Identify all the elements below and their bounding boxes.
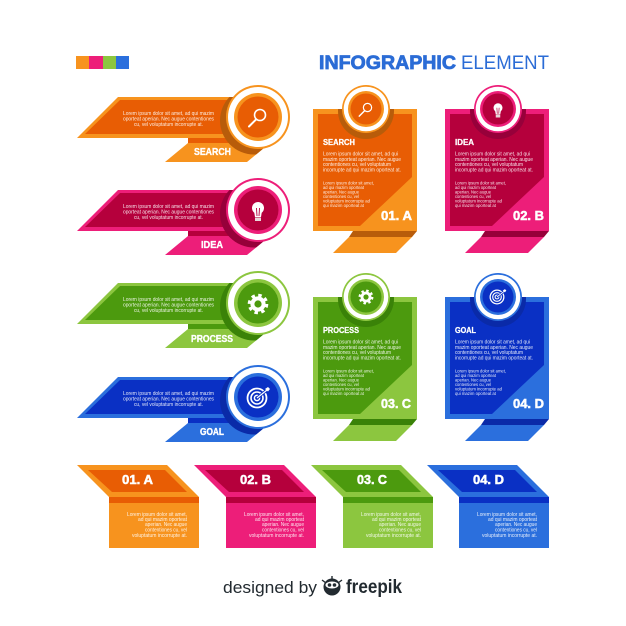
banner: idea: Lorem ipsum dolor sit amet, ad qui mazim: [123, 204, 214, 210]
bottom panel: 01. A: [77, 465, 199, 548]
card: goal 04. D: contentiones cu, vel: [455, 382, 491, 387]
card: process 03. C: 03. C: [381, 397, 411, 411]
card: goal 04. D: ad qui mazim oporteat: [455, 373, 497, 378]
card: process 03. C: Lorem ipsum dolor sit amet,: [323, 368, 374, 374]
card: idea 02. B: voluptatum incorrupte ad: [455, 198, 502, 204]
icon: freepik bee: [322, 576, 342, 596]
card: search 01. A: SEARCH: [323, 138, 355, 147]
card: idea 02. B: mazim oporteat aperian. Nec augue: [455, 157, 533, 163]
card: process 03. C: voluptatum incorrupte ad: [323, 386, 370, 392]
card: idea 02. B: contentiones cu, vel voluptatum: [455, 162, 523, 168]
banner: idea: cu, vel voluptatum incorrupte at.: [134, 215, 203, 221]
card: idea 02. B: Lorem ipsum dolor sit amet,: [455, 180, 506, 186]
footer credit: designed by: [223, 578, 318, 597]
card: idea 02. B: IDEA: [455, 138, 474, 147]
bottom panel: 03. C: 03. C: [357, 473, 387, 487]
card: search 01. A: incorrupte ad qui mazim oporteat at.: [323, 168, 401, 174]
card: goal 04. D: qui mazim oporteat at: [455, 391, 497, 396]
card: idea 02. B: qui mazim oporteat at: [455, 203, 497, 208]
colour swatches: [76, 56, 129, 69]
banner: idea: [77, 178, 290, 255]
bottom panel: 04. D: Lorem ipsum dolor sit amet,: [477, 512, 537, 518]
card: search 01. A: contentiones cu, vel: [323, 194, 359, 199]
bottom panel: 01. A: voluptatum incorrupte at.: [132, 533, 187, 539]
bottom panel: 02. B: ad qui mazim oporteat: [255, 517, 305, 523]
bottom panel: 04. D: 04. D: [473, 473, 504, 487]
title: ELEMENT: [461, 53, 549, 74]
card: search 01. A: mazim oporteat aperian. Nec augue: [323, 157, 401, 163]
card: search 01. A: [313, 83, 417, 253]
card: goal 04. D: Lorem ipsum dolor sit amet, ad qui: [455, 340, 530, 346]
card: goal 04. D: incorrupte ad qui mazim oporteat at.: [455, 356, 533, 362]
card: process 03. C: contentiones cu, vel: [323, 382, 359, 387]
bottom panel: 01. A: 01. A: [122, 473, 153, 487]
card: goal 04. D: contentiones cu, vel voluptatum: [455, 350, 523, 356]
card: search 01. A: ad qui mazim oporteat: [323, 185, 365, 190]
card: search 01. A: voluptatum incorrupte ad: [323, 198, 370, 204]
bottom panel: 03. C: voluptatum incorrupte at.: [366, 533, 421, 539]
bottom panel: 01. A: contentiones cu, vel: [145, 528, 187, 534]
card: process 03. C: aperian. Nec augue: [323, 378, 359, 382]
card: process 03. C: Lorem ipsum dolor sit amet, ad qui: [323, 340, 398, 346]
card: process 03. C: contentiones cu, vel voluptatum: [323, 350, 391, 356]
card: process 03. C: incorrupte ad qui mazim oporteat at.: [323, 356, 401, 362]
banner: search: Lorem ipsum dolor sit amet, ad qui mazim: [123, 111, 214, 117]
banner: search: SEARCH: [194, 147, 231, 158]
card: search 01. A: Lorem ipsum dolor sit amet, ad qui: [323, 152, 398, 158]
card: search 01. A: aperian. Nec augue: [323, 190, 359, 194]
banner: goal: cu, vel voluptatum incorrupte at.: [134, 402, 203, 408]
banner: process: Lorem ipsum dolor sit amet, ad qui mazim: [123, 297, 214, 303]
card: goal 04. D: voluptatum incorrupte ad: [455, 386, 502, 392]
title: INFOGRAPHIC: [319, 53, 456, 74]
bottom panel: 02. B: contentiones cu, vel: [262, 528, 304, 534]
banner: goal: oporteat aperian. Nec augue contentiones: [123, 396, 214, 402]
card: process 03. C: mazim oporteat aperian. Nec augue: [323, 345, 401, 351]
title: [319, 53, 549, 74]
bottom panel: 02. B: 02. B: [240, 473, 271, 487]
banner: search: oporteat aperian. Nec augue contentiones: [123, 116, 214, 122]
card: search 01. A: 01. A: [381, 209, 412, 223]
card: idea 02. B: [445, 83, 549, 253]
banner: process: PROCESS: [191, 334, 233, 345]
card: goal 04. D: Lorem ipsum dolor sit amet,: [455, 368, 506, 374]
bottom panel: 02. B: voluptatum incorrupte at.: [249, 533, 304, 539]
card: goal 04. D: aperian. Nec augue: [455, 378, 491, 382]
bottom panel: 01. A: ad qui mazim oporteat: [138, 517, 188, 523]
card: search 01. A: Lorem ipsum dolor sit amet,: [323, 180, 374, 186]
card: idea 02. B: contentiones cu, vel: [455, 194, 491, 199]
bottom panel: 03. C: [311, 465, 433, 548]
card: idea 02. B: 02. B: [513, 209, 544, 223]
banner: goal: GOAL: [200, 427, 224, 438]
bottom panel: 03. C: ad qui mazim oporteat: [372, 517, 422, 523]
bottom panel: 04. D: aperian. Nec augue: [495, 522, 537, 528]
banner: search: cu, vel voluptatum incorrupte at.: [134, 122, 203, 128]
banner: process: [77, 271, 290, 348]
card: idea 02. B: aperian. Nec augue: [455, 190, 491, 194]
bottom panel: 01. A: Lorem ipsum dolor sit amet,: [127, 512, 187, 518]
bottom panel: 02. B: aperian. Nec augue: [262, 522, 304, 528]
card: search 01. A: contentiones cu, vel voluptatum: [323, 162, 391, 168]
banner: idea: oporteat aperian. Nec augue contentiones: [123, 210, 214, 216]
bottom panel: 03. C: aperian. Nec augue: [379, 522, 421, 528]
card: process 03. C: qui mazim oporteat at: [323, 391, 365, 396]
card: goal 04. D: GOAL: [455, 326, 476, 335]
bottom panel: 02. B: Lorem ipsum dolor sit amet,: [244, 512, 304, 518]
bottom panel: 04. D: ad qui mazim oporteat: [488, 517, 538, 523]
card: goal 04. D: mazim oporteat aperian. Nec augue: [455, 345, 533, 351]
bottom panel: 04. D: voluptatum incorrupte at.: [482, 533, 537, 539]
card: process 03. C: PROCESS: [323, 326, 360, 335]
bottom panel: 04. D: contentiones cu, vel: [495, 528, 537, 534]
footer credit: freepik: [346, 577, 402, 598]
bottom panel: 03. C: contentiones cu, vel: [379, 528, 421, 534]
banner: idea: IDEA: [201, 240, 223, 251]
banner: process: oporteat aperian. Nec augue contentiones: [123, 302, 214, 308]
bottom panel: 03. C: Lorem ipsum dolor sit amet,: [361, 512, 421, 518]
bottom panel: 04. D: [427, 465, 549, 548]
card: search 01. A: qui mazim oporteat at: [323, 203, 365, 208]
bottom panel: 02. B: [194, 465, 316, 548]
banner: process: cu, vel voluptatum incorrupte at.: [134, 308, 203, 314]
banner: search: [77, 85, 290, 162]
card: idea 02. B: ad qui mazim oporteat: [455, 185, 497, 190]
bottom panel: 01. A: aperian. Nec augue: [145, 522, 187, 528]
card: process 03. C: [313, 271, 417, 441]
card: idea 02. B: incorrupte ad qui mazim oporteat at.: [455, 168, 533, 174]
card: goal 04. D: 04. D: [513, 397, 544, 411]
card: goal 04. D: [445, 271, 549, 441]
banner: goal: Lorem ipsum dolor sit amet, ad qui mazim: [123, 391, 214, 397]
card: idea 02. B: Lorem ipsum dolor sit amet, ad qui: [455, 152, 530, 158]
footer credit: [223, 576, 402, 598]
card: process 03. C: ad qui mazim oporteat: [323, 373, 365, 378]
banner: goal: [77, 365, 290, 442]
